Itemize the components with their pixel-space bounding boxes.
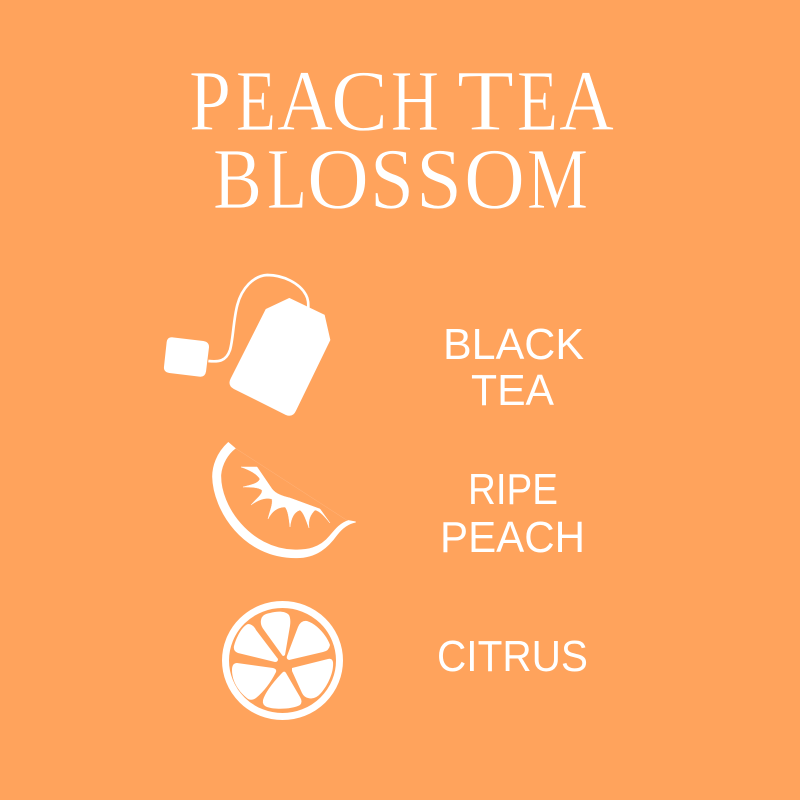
title: S [370, 130, 414, 227]
title: O [307, 130, 369, 227]
label: black tea: BLACK [443, 321, 584, 369]
icon: citrus slice [226, 604, 340, 716]
title: E [517, 52, 558, 149]
label: black tea: TEA [471, 367, 554, 415]
title: P [189, 52, 231, 149]
label: citrus: CITRUS [437, 633, 588, 681]
title: L [267, 130, 307, 227]
title: B [213, 130, 262, 227]
title: S [416, 130, 462, 227]
label: ripe peach: RIPE [468, 466, 558, 514]
title: M [527, 130, 588, 227]
label: ripe peach [440, 466, 585, 562]
title: E [236, 52, 276, 149]
title: H [391, 52, 439, 149]
title: A [559, 52, 614, 149]
title: T [457, 52, 514, 149]
title: O [464, 130, 525, 227]
label: black tea [443, 321, 584, 415]
label: ripe peach: PEACH [440, 514, 585, 562]
title [189, 52, 614, 227]
icon: peach slice [213, 443, 356, 558]
icon: tea bag [164, 275, 330, 415]
title: C [331, 52, 388, 149]
title: A [277, 52, 333, 149]
